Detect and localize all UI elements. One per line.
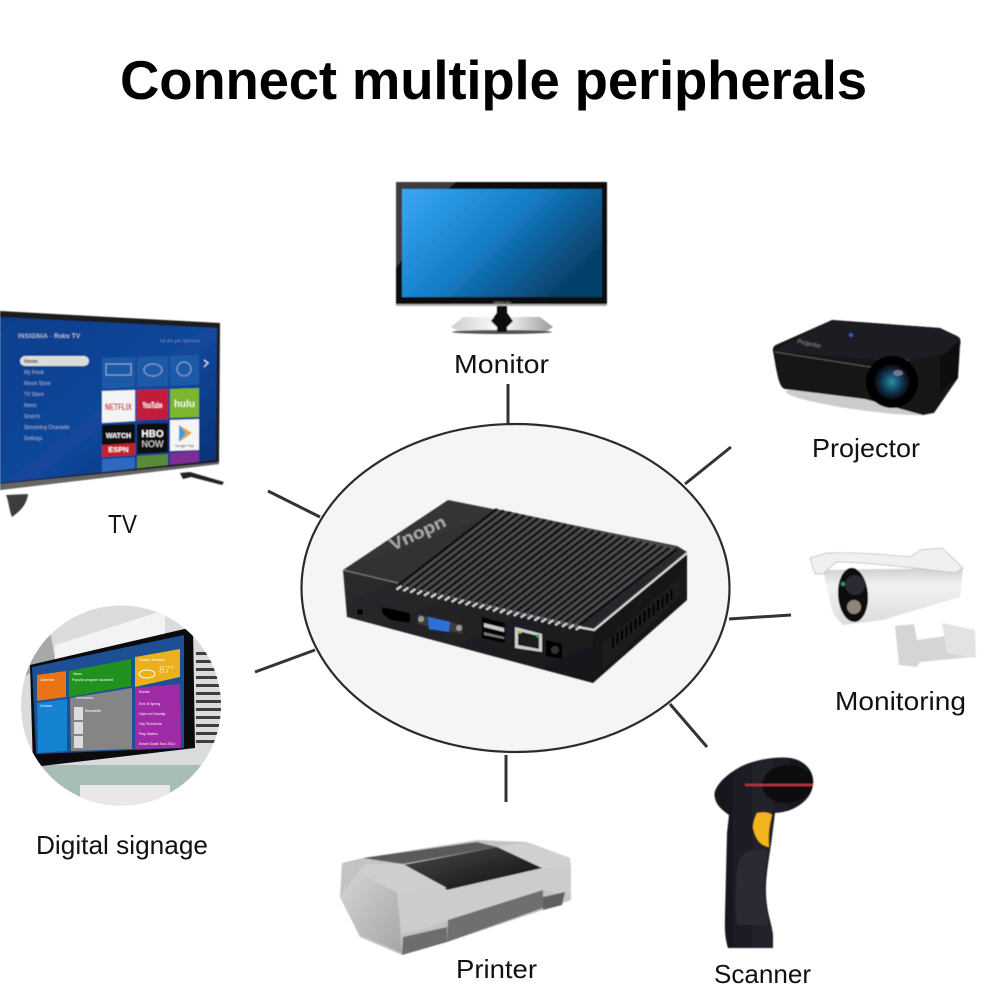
menu: Settings [24,436,43,442]
brand: SAMSUNG [493,301,511,305]
connector: digital signage [255,650,315,672]
chin line [396,304,607,306]
heat sink fins [396,509,677,630]
ceiling panel [55,612,165,659]
menu: TV Store [24,392,44,398]
label: printer: Printer [456,954,537,984]
right foot [543,892,565,910]
camera body [823,568,963,625]
label: monitor: Monitor [454,349,549,379]
chevron [204,360,208,367]
hood [810,548,963,574]
tile: Google Play: Google Play [175,444,194,448]
signage text: End of Spring [139,702,160,706]
tile: HBO Now: NOW [142,439,164,449]
VGA port [418,614,463,634]
HDMI port [382,607,410,623]
silver edge [578,553,687,630]
back lid [363,842,497,864]
signage text: Play Station [139,732,158,736]
signage text: Open on Sunday [139,712,166,716]
menu: Movie Store [24,381,51,387]
USB ports [482,617,505,643]
LED [847,600,861,614]
TV user interface [18,334,200,478]
TV screen [0,317,217,483]
tile: YouTube: YouTube [142,401,163,410]
signage text: Information [76,696,94,700]
tile: orange [37,671,66,701]
connector: monitor [506,384,510,424]
right louvres [196,652,221,743]
monitor [396,182,607,334]
weather icon [139,670,155,678]
signage text: Newsletter [85,709,102,713]
menu: Search [24,414,40,420]
connector: projector [685,447,731,484]
scanner body [714,758,813,948]
tile: hulu: hulu [174,399,195,410]
tile: Netflix [102,390,135,423]
lens [866,356,918,408]
lens [845,575,865,595]
projector [773,320,961,420]
LAN port [515,627,542,652]
tile: hulu [170,388,199,418]
front [397,866,571,933]
signage text: Calendar [40,678,55,682]
right top surface [497,842,571,868]
wall plate [942,623,976,658]
indicator [841,582,845,586]
connector: printer [504,755,508,802]
signage text: Today's Weather [139,658,166,662]
base [402,927,447,955]
bracket arm [895,624,973,667]
label: projector: Projector [812,433,920,463]
security camera [810,548,976,667]
power button [357,609,363,615]
connector: tv [268,491,320,517]
laser beam [745,784,813,786]
screen [32,635,184,754]
brand: INSIGNIA · Roku TV [18,334,80,340]
signage text: Contact [40,704,52,708]
grip [735,850,768,925]
right leg [180,472,224,485]
tile: Watch ESPN [102,424,135,457]
mini PC [343,500,687,683]
title: Connect multiple peripherals [120,50,867,111]
glass lower [40,765,202,806]
floor shadow [785,384,935,420]
printer silhouette [340,840,571,955]
dark face [836,567,870,623]
trim line [775,352,908,367]
connector: scanner [670,704,707,747]
tile: purple [135,684,181,749]
tray [447,890,543,942]
background building [18,605,224,807]
side face [593,552,687,683]
tile: Watch ESPN: WATCH [106,433,131,440]
TV [0,311,224,517]
signage text: City Ted Movie [139,722,162,726]
TV bezel [0,311,220,490]
clock: 12:40 pm Options [160,339,200,343]
bezel [396,182,607,306]
label: scanner: Scanner [714,959,811,989]
left side panel [340,872,402,953]
signage text: News [73,672,82,676]
DC jack [546,640,562,659]
tile: Watch ESPN: ESPN [108,445,129,454]
tile: grey [70,688,132,751]
cover [403,847,542,890]
tile: Google Play [170,419,199,451]
left leg [6,494,28,517]
signage text [40,658,175,746]
digital signage [18,605,224,807]
window [760,763,814,805]
trigger [753,812,772,847]
stand base shadow [452,330,552,334]
brand: Projector [797,339,821,350]
menu: News [24,403,37,409]
tiles row 4 [102,450,200,473]
top detail [849,333,853,337]
side panel and vents [603,577,680,670]
tile: blue [37,699,67,753]
stand neck [491,305,513,332]
menu: My Feed [24,370,44,376]
tile: Netflix: NETFLIX [105,402,132,412]
tile: HBO Now: HBO [141,429,164,440]
signage text: Popular program launched [72,678,113,682]
signage text: Smart Goals Tour 2014 [139,742,175,746]
menu: Streaming Channels [24,425,70,431]
front face [343,570,593,683]
screen [402,189,602,297]
top plate [343,500,687,628]
logo: Vnopn [387,512,449,555]
body silhouette [773,320,961,415]
menu [24,359,70,442]
thumbnails [74,707,83,748]
shoulder [358,864,447,893]
label: monitoring: Monitoring [835,686,966,716]
stand base [451,317,553,332]
connector: monitoring [729,615,791,619]
signage text: Events [139,690,150,694]
signage text: 87° [159,665,174,676]
menu highlight [20,356,89,366]
screen bezel [30,627,195,767]
tile: YouTube [137,389,168,420]
tile: HBO Now [137,423,168,454]
printer [340,840,571,955]
TV bottom silver strip [0,462,219,490]
bezel highlight [396,182,456,268]
tile: green [69,659,131,697]
scanner [714,758,814,948]
vent [940,342,958,392]
menu: Home [24,359,38,365]
label: digital signage: Digital signage [36,830,208,860]
top surface [773,320,960,362]
tiles row 1 [102,355,199,389]
tile: yellow [135,649,180,687]
label: TV: TV [108,509,138,539]
central ellipse [302,424,730,752]
